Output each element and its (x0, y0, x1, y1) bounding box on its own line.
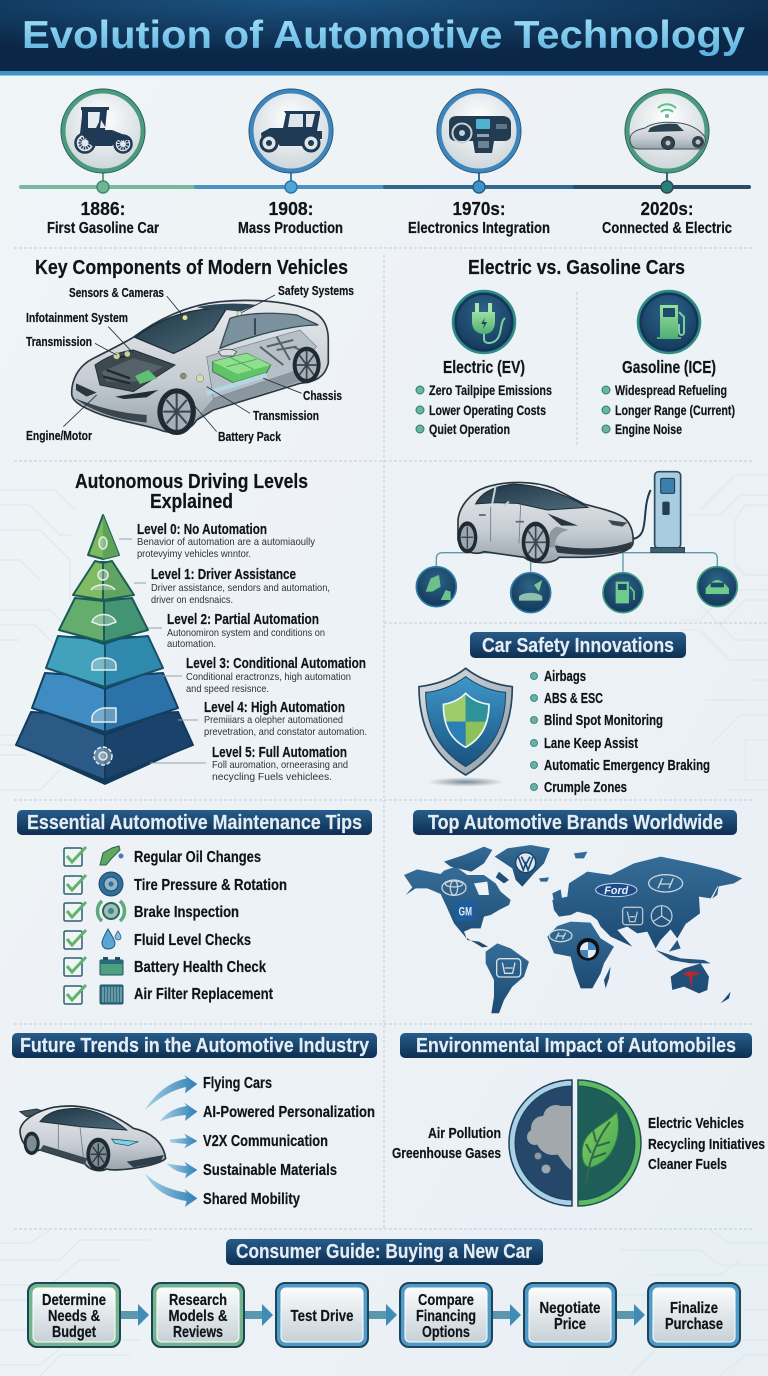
gasoline column: Gasoline (ICE) (622, 357, 716, 377)
callout labels: Safety Systems (278, 283, 354, 298)
step 5: Negotiate (540, 1300, 601, 1317)
logo: Tesla (682, 971, 701, 990)
logo: BMW (577, 938, 599, 961)
icon: fluid drop (102, 929, 121, 949)
title banner (0, 0, 768, 76)
icon: electric plug (453, 291, 515, 353)
level 5: necycling Fuels vehiclees. (212, 771, 332, 783)
icon: battery (100, 957, 123, 975)
level 4: Premiiiars a olepher automationed (204, 714, 343, 726)
panel: electric vs gasoline (416, 257, 735, 437)
level 1: Level 1: Driver Assistance (151, 567, 296, 583)
level 1 (151, 567, 330, 606)
icon: feature circle 1 (416, 567, 456, 607)
heading: Explained (150, 491, 233, 513)
level 2: Autonomiron system and conditions on (167, 627, 325, 639)
heading (75, 471, 308, 513)
logo: Ford (596, 883, 637, 897)
milestone 1908 (238, 89, 343, 237)
trend arrows (145, 1075, 197, 1207)
step 2: Research (169, 1292, 227, 1309)
tips list: Fluid Level Checks (134, 932, 251, 949)
callout labels: Engine/Motor (26, 428, 92, 443)
impact labels right (648, 1116, 765, 1173)
level icons (91, 537, 116, 765)
gasoline column: Widespread Refueling (615, 382, 727, 398)
callout labels: Sensors & Cameras (69, 285, 164, 300)
icon: brake (98, 901, 124, 921)
panel: consumer guide (28, 1239, 740, 1347)
connector tree (436, 553, 717, 572)
logo: Hyundai Africa (549, 930, 572, 942)
EV column (416, 357, 552, 437)
panel: car safety (419, 632, 710, 796)
icon: fuel pump (638, 291, 700, 353)
level 2: automation. (167, 638, 216, 650)
icon: connected car (630, 104, 705, 150)
panel: environmental impact (392, 1033, 765, 1206)
checkboxes (64, 847, 86, 1004)
gasoline column (602, 357, 735, 437)
gasoline column: Engine Noise (615, 421, 682, 437)
callout labels: Infotainment System (26, 310, 128, 325)
icon: tire (99, 872, 123, 896)
logo: GM: GM (459, 904, 472, 918)
icon: air filter (100, 985, 123, 1004)
icon: antique car (76, 107, 132, 152)
year label: 1908: (268, 198, 314, 219)
title: Evolution of Automotive Technology (22, 14, 745, 57)
tips list: Brake Inspection (134, 904, 239, 921)
callout labels: Transmission (253, 408, 319, 423)
split circle icon (509, 1080, 641, 1206)
level 2: Level 2: Partial Automation (167, 612, 319, 628)
caption: Connected & Electric (602, 220, 732, 237)
level 3 (186, 656, 366, 695)
level 4: Level 4: High Automation (204, 700, 345, 716)
panel: autonomous levels (16, 471, 367, 785)
trend labels (203, 1075, 375, 1208)
step 2: Reviews (173, 1324, 223, 1341)
impact labels left: Air Pollution (428, 1126, 501, 1142)
logo: GM (455, 901, 476, 921)
trend labels: Sustainable Materials (203, 1162, 337, 1179)
step 1 (28, 1283, 120, 1347)
section banner: Top Automotive Brands Worldwide (428, 812, 723, 834)
timeline axis (21, 185, 749, 189)
callout labels: Transmission (26, 334, 92, 349)
safety list: ABS & ESC (544, 691, 603, 707)
icon: oil can (100, 846, 124, 865)
panel: key components (26, 257, 354, 444)
level 2 (167, 612, 325, 650)
level 0: Level 0: No Automation (137, 522, 267, 538)
heading: Electric vs. Gasoline Cars (468, 257, 685, 279)
impact labels left: Greenhouse Gases (392, 1146, 501, 1162)
leader lines (119, 539, 206, 763)
step 3 (276, 1283, 368, 1347)
silver electric car (457, 482, 633, 563)
icon: charging station (632, 472, 685, 553)
icon: feature circle 2 (511, 573, 551, 613)
step 1: Needs & (48, 1308, 100, 1325)
section banner: Future Trends in the Automotive Industry (20, 1035, 370, 1057)
level 5 (212, 745, 348, 783)
level 4 (204, 700, 367, 738)
concept car (20, 1106, 166, 1171)
trend labels: V2X Communication (203, 1133, 328, 1150)
safety list: Automatic Emergency Braking (544, 758, 710, 774)
icon: feature circle 4 (697, 567, 737, 607)
step 2: Models & (168, 1308, 228, 1325)
EV column: Electric (EV) (443, 357, 525, 377)
EV column: Lower Operating Costs (429, 402, 546, 418)
logo: Toyota (442, 880, 466, 895)
icon: shield (419, 668, 512, 787)
heading: Autonomous Driving Levels (75, 471, 308, 493)
caption: First Gasoline Car (47, 220, 159, 237)
level 4: prevetration, and constator automation. (204, 726, 367, 738)
section banner: Consumer Guide: Buying a New Car (236, 1241, 532, 1263)
step 6: Purchase (665, 1316, 723, 1333)
icon: leaf (582, 1112, 618, 1183)
logo: Honda square (623, 907, 643, 925)
heading: Key Components of Modern Vehicles (35, 257, 348, 279)
panel: maintenance tips (17, 810, 372, 1004)
level 0: Benavior of automation are a automiaoully (137, 536, 316, 548)
level 1: driver on endsnaics. (151, 594, 233, 606)
milestone 2020s (602, 89, 732, 237)
impact labels right: Electric Vehicles (648, 1116, 744, 1132)
panel: future trends (12, 1033, 377, 1208)
tips list: Tire Pressure & Rotation (134, 877, 287, 894)
year label: 2020s: (640, 198, 694, 219)
EV column: Quiet Operation (429, 421, 510, 437)
tips list: Air Filter Replacement (134, 986, 274, 1003)
callout labels (26, 283, 354, 444)
section banner: Environmental Impact of Automobiles (416, 1035, 736, 1057)
world map (404, 845, 742, 1013)
step 6: Finalize (670, 1300, 718, 1317)
trend labels: Flying Cars (203, 1075, 272, 1092)
level 0: protevyimy vehicles wnntor. (137, 548, 251, 560)
panel: top brands (404, 810, 742, 1013)
step 2 (152, 1283, 244, 1347)
milestone 1886 (47, 89, 159, 237)
year label: 1886: (80, 198, 126, 219)
safety list: Lane Keep Assist (544, 736, 638, 752)
tips list: Battery Health Check (134, 959, 266, 976)
icon: dashboard (449, 116, 511, 153)
level 3: and speed resisnce. (186, 683, 269, 695)
safety list (530, 669, 710, 796)
level 1: Driver assistance, sendors and automation, (151, 582, 330, 594)
level 3: Conditional eractronzs, high automation (186, 671, 351, 683)
step 5: Price (554, 1316, 586, 1333)
tips list: Regular Oil Changes (134, 849, 261, 866)
step 4: Options (422, 1324, 470, 1341)
step 4: Compare (418, 1292, 474, 1309)
safety list: Blind Spot Monitoring (544, 713, 663, 729)
icon: feature circle 3 (603, 573, 643, 613)
flow arrows (120, 1304, 645, 1326)
year label: 1970s: (452, 198, 506, 219)
logo: Ford: Ford (604, 885, 629, 897)
caption: Mass Production (238, 220, 343, 237)
safety list: Crumple Zones (544, 780, 627, 796)
callout labels: Chassis (303, 388, 342, 403)
step 1: Budget (52, 1324, 96, 1341)
icon: model T (261, 111, 322, 151)
panel: EV charging (416, 472, 737, 613)
level 5: Foll auromation, orneerasing and (212, 759, 348, 771)
EV column: Zero Tailpipe Emissions (429, 382, 552, 398)
icon: smog cloud (527, 1105, 571, 1174)
section banner: Car Safety Innovations (482, 635, 674, 657)
callout labels: Battery Pack (218, 429, 282, 444)
step 4 (400, 1283, 492, 1347)
step 6 (648, 1283, 740, 1347)
step 1: Determine (42, 1292, 106, 1309)
step 5 (524, 1283, 616, 1347)
trend labels: AI-Powered Personalization (203, 1104, 375, 1121)
section banner: Essential Automotive Maintenance Tips (27, 812, 362, 834)
trend labels: Shared Mobility (203, 1191, 300, 1208)
safety list: Airbags (544, 669, 586, 685)
milestone 1970s (408, 89, 550, 237)
level 3: Level 3: Conditional Automation (186, 656, 366, 672)
caption: Electronics Integration (408, 220, 550, 237)
step 4: Financing (416, 1308, 476, 1325)
cutaway car illustration (63, 295, 328, 435)
pyramid chart (16, 515, 206, 785)
logo: Hyundai (649, 875, 683, 892)
level 5: Level 5: Full Automation (212, 745, 347, 761)
logo: Mercedes (651, 906, 672, 926)
tips list (134, 849, 287, 1003)
impact labels right: Cleaner Fuels (648, 1157, 727, 1173)
step 3: Test Drive (290, 1308, 354, 1325)
panel: timeline (21, 89, 749, 237)
logo: Honda (497, 959, 521, 977)
level 0 (137, 522, 316, 560)
impact labels left (392, 1126, 501, 1162)
logo: VW (516, 853, 536, 873)
